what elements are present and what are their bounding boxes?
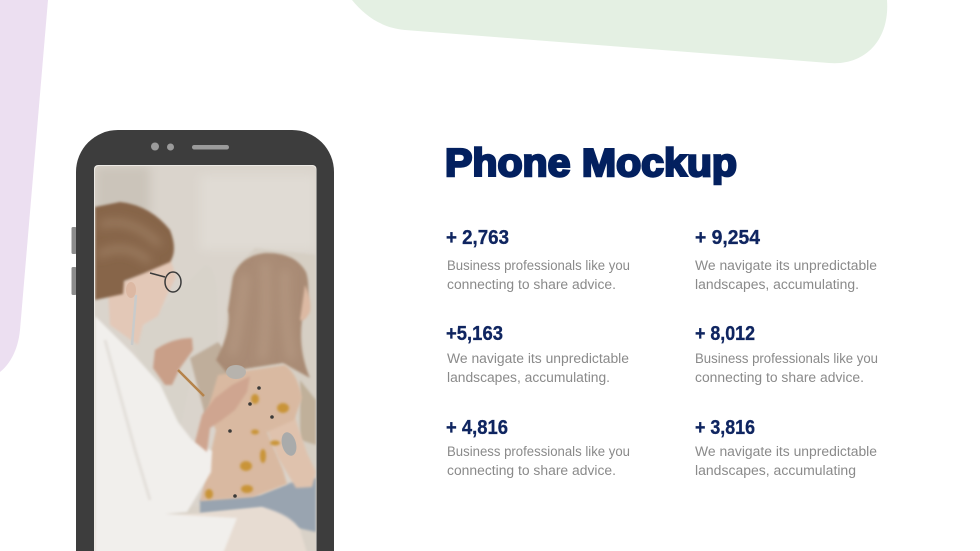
photo: doctor examining a child xyxy=(95,166,316,551)
stat: 9,254: We navigate its unpredictable xyxy=(695,258,877,273)
stat: 2,763: + 2,763 xyxy=(446,227,509,249)
glasses xyxy=(150,272,181,292)
stat: 3,816: We navigate its unpredictable xyxy=(695,444,877,459)
stat: 4,816: connecting to share advice. xyxy=(447,463,616,478)
title: Phone Mockup xyxy=(445,142,737,185)
stat: 5,163: +5,163 xyxy=(446,323,503,345)
stat: 4,816: Business professionals like you xyxy=(447,444,630,459)
doctor raised hand xyxy=(153,338,193,385)
stethoscope chest piece xyxy=(226,365,246,379)
stat: 5,163: landscapes, accumulating. xyxy=(447,370,610,385)
glucose sensor patch xyxy=(282,432,296,456)
screen edge xyxy=(94,165,316,551)
doctor ear xyxy=(126,282,136,298)
phone mockup xyxy=(72,130,334,551)
doctor forearm and hand xyxy=(195,376,250,452)
stat: 8,012: connecting to share advice. xyxy=(695,370,864,385)
child face xyxy=(300,285,310,320)
stethoscope tube xyxy=(132,295,136,345)
stat: 8,012 xyxy=(695,323,878,385)
jeans xyxy=(200,478,316,532)
doctor face and neck xyxy=(108,258,176,345)
stat: 4,816 xyxy=(446,417,630,478)
decorative green shape xyxy=(352,0,887,63)
stat: 3,816 xyxy=(695,417,877,478)
child arm xyxy=(267,412,316,488)
stat: 8,012: + 8,012 xyxy=(695,323,755,345)
phone side buttons xyxy=(72,227,76,295)
stat: 4,816: + 4,816 xyxy=(446,417,508,439)
phone camera and speaker xyxy=(151,142,229,150)
stat: 5,163: We navigate its unpredictable xyxy=(447,351,629,366)
stat: 2,763: Business professionals like you xyxy=(447,258,630,273)
dress lemon pattern xyxy=(205,394,289,499)
stat: 9,254: landscapes, accumulating. xyxy=(695,277,859,292)
pencil xyxy=(178,370,204,396)
stat: 3,816: landscapes, accumulating xyxy=(695,463,856,478)
stat: 2,763: connecting to share advice. xyxy=(447,277,616,292)
stat: 9,254 xyxy=(695,227,877,292)
stat: 5,163 xyxy=(446,323,629,385)
phone body xyxy=(76,130,334,551)
child dress xyxy=(200,365,302,501)
doctor shirt xyxy=(95,316,237,551)
stat: 8,012: Business professionals like you xyxy=(695,351,878,366)
stat: 9,254: + 9,254 xyxy=(695,227,761,249)
doctor hair xyxy=(95,202,174,300)
stat: 2,763 xyxy=(446,227,630,292)
doctor pants xyxy=(194,506,306,551)
pillows xyxy=(189,249,316,447)
child hair xyxy=(216,253,310,378)
decorative purple shape xyxy=(0,0,48,372)
stat: 3,816: + 3,816 xyxy=(695,417,755,439)
